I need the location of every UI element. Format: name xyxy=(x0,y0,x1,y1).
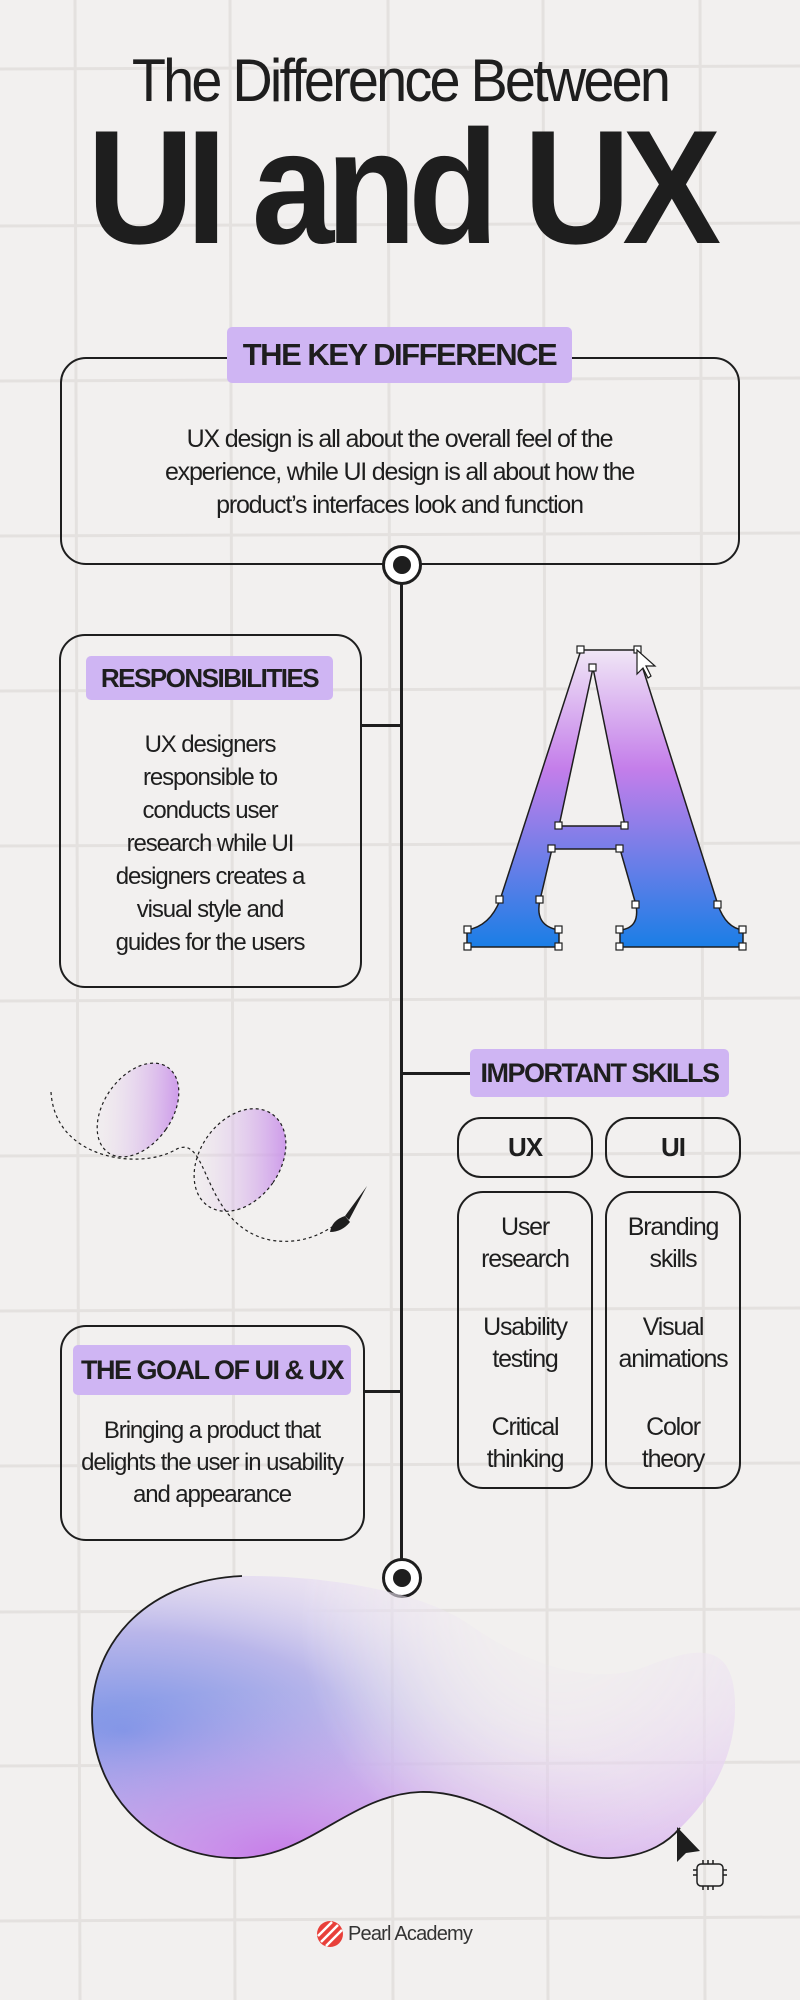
logo: Pearl Academy xyxy=(317,1921,473,1947)
list: UI skills: theory xyxy=(642,1445,704,1473)
heading: important skills: IMPORTANT SKILLS xyxy=(480,1058,718,1088)
heading: the key difference: THE KEY DIFFERENCE xyxy=(243,337,556,372)
title line 2: UI and UX xyxy=(87,97,713,278)
panel: goal xyxy=(60,1325,365,1541)
heading: responsibilities: RESPONSIBILITIES xyxy=(101,663,318,693)
key difference text xyxy=(165,425,634,519)
goal text: and appearance xyxy=(133,1481,291,1508)
blob illustration xyxy=(91,1575,735,1890)
responsibilities text: conducts user xyxy=(142,797,278,824)
node: top xyxy=(382,545,422,585)
pill: UI: UI xyxy=(661,1132,685,1162)
responsibilities text: UX designers xyxy=(145,731,275,758)
decoration: brush strokes xyxy=(50,1062,367,1242)
responsibilities text: guides for the users xyxy=(116,929,304,956)
responsibilities text xyxy=(116,731,306,956)
heading: goal xyxy=(73,1345,351,1395)
list: UX skills: Usability xyxy=(483,1313,567,1341)
key difference text: UX design is all about the overall feel of the xyxy=(187,425,612,453)
responsibilities text: visual style and xyxy=(137,896,283,923)
connector: responsibilities xyxy=(362,724,402,727)
heading: responsibilities xyxy=(86,656,333,700)
title line 1: The Difference Between xyxy=(132,47,668,114)
goal text: Bringing a product that xyxy=(104,1417,320,1444)
panel: responsibilities xyxy=(59,634,362,988)
responsibilities text: responsible to xyxy=(143,764,277,791)
goal text xyxy=(81,1417,344,1508)
node: bottom xyxy=(382,1558,422,1598)
connector: goal xyxy=(365,1390,402,1393)
pill: UX xyxy=(457,1117,593,1178)
responsibilities text: designers creates a xyxy=(116,863,304,890)
icon: letter A xyxy=(463,645,747,951)
list: UI skills xyxy=(605,1191,741,1489)
responsibilities text: research while UI xyxy=(127,830,293,857)
key difference text: experience, while UI design is all about how the xyxy=(165,458,634,486)
timeline line xyxy=(400,565,403,1578)
list: UI skills: animations xyxy=(619,1345,727,1373)
list: UX skills: testing xyxy=(492,1345,558,1373)
list: UI skills: Color xyxy=(646,1413,700,1441)
list: UX skills xyxy=(457,1191,593,1489)
key difference text: product’s interfaces look and function xyxy=(216,491,583,519)
list: UX skills: research xyxy=(481,1245,569,1273)
logo: Pearl Academy: Pearl Academy xyxy=(348,1923,472,1945)
goal text: delights the user in usability xyxy=(81,1449,343,1476)
list: UI skills: skills xyxy=(650,1245,696,1273)
panel: key difference xyxy=(60,357,740,565)
heading: important skills xyxy=(470,1049,729,1097)
pill: UI xyxy=(605,1117,741,1178)
connector: skills xyxy=(402,1072,470,1075)
list: UX skills: User xyxy=(501,1213,549,1241)
list: UI skills: Visual xyxy=(643,1313,703,1341)
pill: UX: UX xyxy=(508,1132,542,1162)
list: UI skills: Branding xyxy=(628,1213,718,1241)
heading: goal: THE GOAL OF UI & UX xyxy=(81,1355,343,1385)
list: UX skills: Critical xyxy=(492,1413,558,1441)
heading: the key difference xyxy=(227,327,572,383)
list: UX skills: thinking xyxy=(487,1445,563,1473)
